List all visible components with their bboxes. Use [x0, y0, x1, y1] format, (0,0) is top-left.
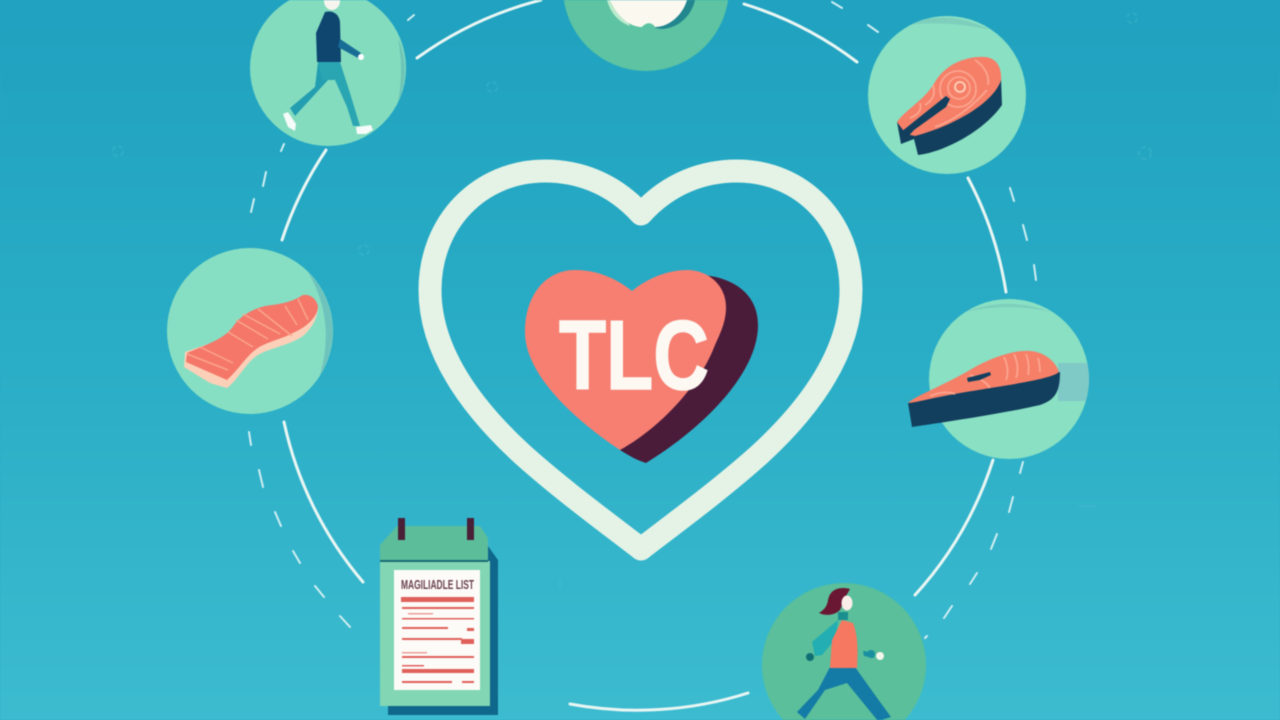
paper heading: MAGILIADLE LIST — [401, 577, 474, 592]
fillet stripes — [187, 299, 308, 370]
panel: clipboard — [380, 518, 498, 715]
paper lines — [401, 597, 474, 683]
front leg — [318, 62, 360, 126]
paper — [394, 570, 480, 690]
TLC label: TLC — [559, 300, 709, 410]
steak side — [897, 78, 1002, 155]
legs — [797, 667, 891, 720]
heart shadow — [620, 275, 758, 463]
back arm — [812, 620, 838, 656]
steak top — [908, 351, 1059, 403]
panel: salmon fillet, left — [167, 248, 333, 414]
steak side — [908, 372, 1060, 427]
torso — [316, 11, 341, 62]
arm — [338, 39, 361, 58]
torso — [830, 620, 858, 668]
front arm — [863, 651, 875, 658]
shoes — [283, 112, 296, 131]
fillet underside — [184, 306, 318, 388]
cycle ring: solid arcs — [282, 0, 1006, 710]
head — [324, 0, 340, 10]
coral heart — [525, 270, 726, 450]
clipboard clips — [398, 518, 405, 540]
steak marbling — [930, 354, 1040, 396]
fillet top — [186, 295, 318, 380]
hair — [819, 588, 850, 615]
central TLC heart — [525, 270, 758, 463]
panel: walking figure, top left — [250, 0, 406, 146]
clipboard body — [380, 561, 490, 706]
steak slit — [901, 96, 950, 143]
panel: apple, top — [563, 0, 729, 71]
neck — [838, 612, 848, 620]
back leg — [290, 62, 336, 116]
outlined large heart — [430, 171, 851, 549]
steak swirl — [910, 60, 988, 127]
panel: walking woman, bottom right — [762, 583, 926, 720]
clipboard top — [380, 526, 488, 561]
clipboard shadow — [388, 535, 498, 715]
panel: salmon steak, right — [908, 299, 1092, 459]
cycle ring: outer dashes — [249, 2, 1036, 638]
face — [842, 596, 852, 610]
steak slit — [967, 372, 991, 382]
panel: salmon steak, top right — [868, 16, 1026, 174]
steak top — [897, 57, 1001, 136]
